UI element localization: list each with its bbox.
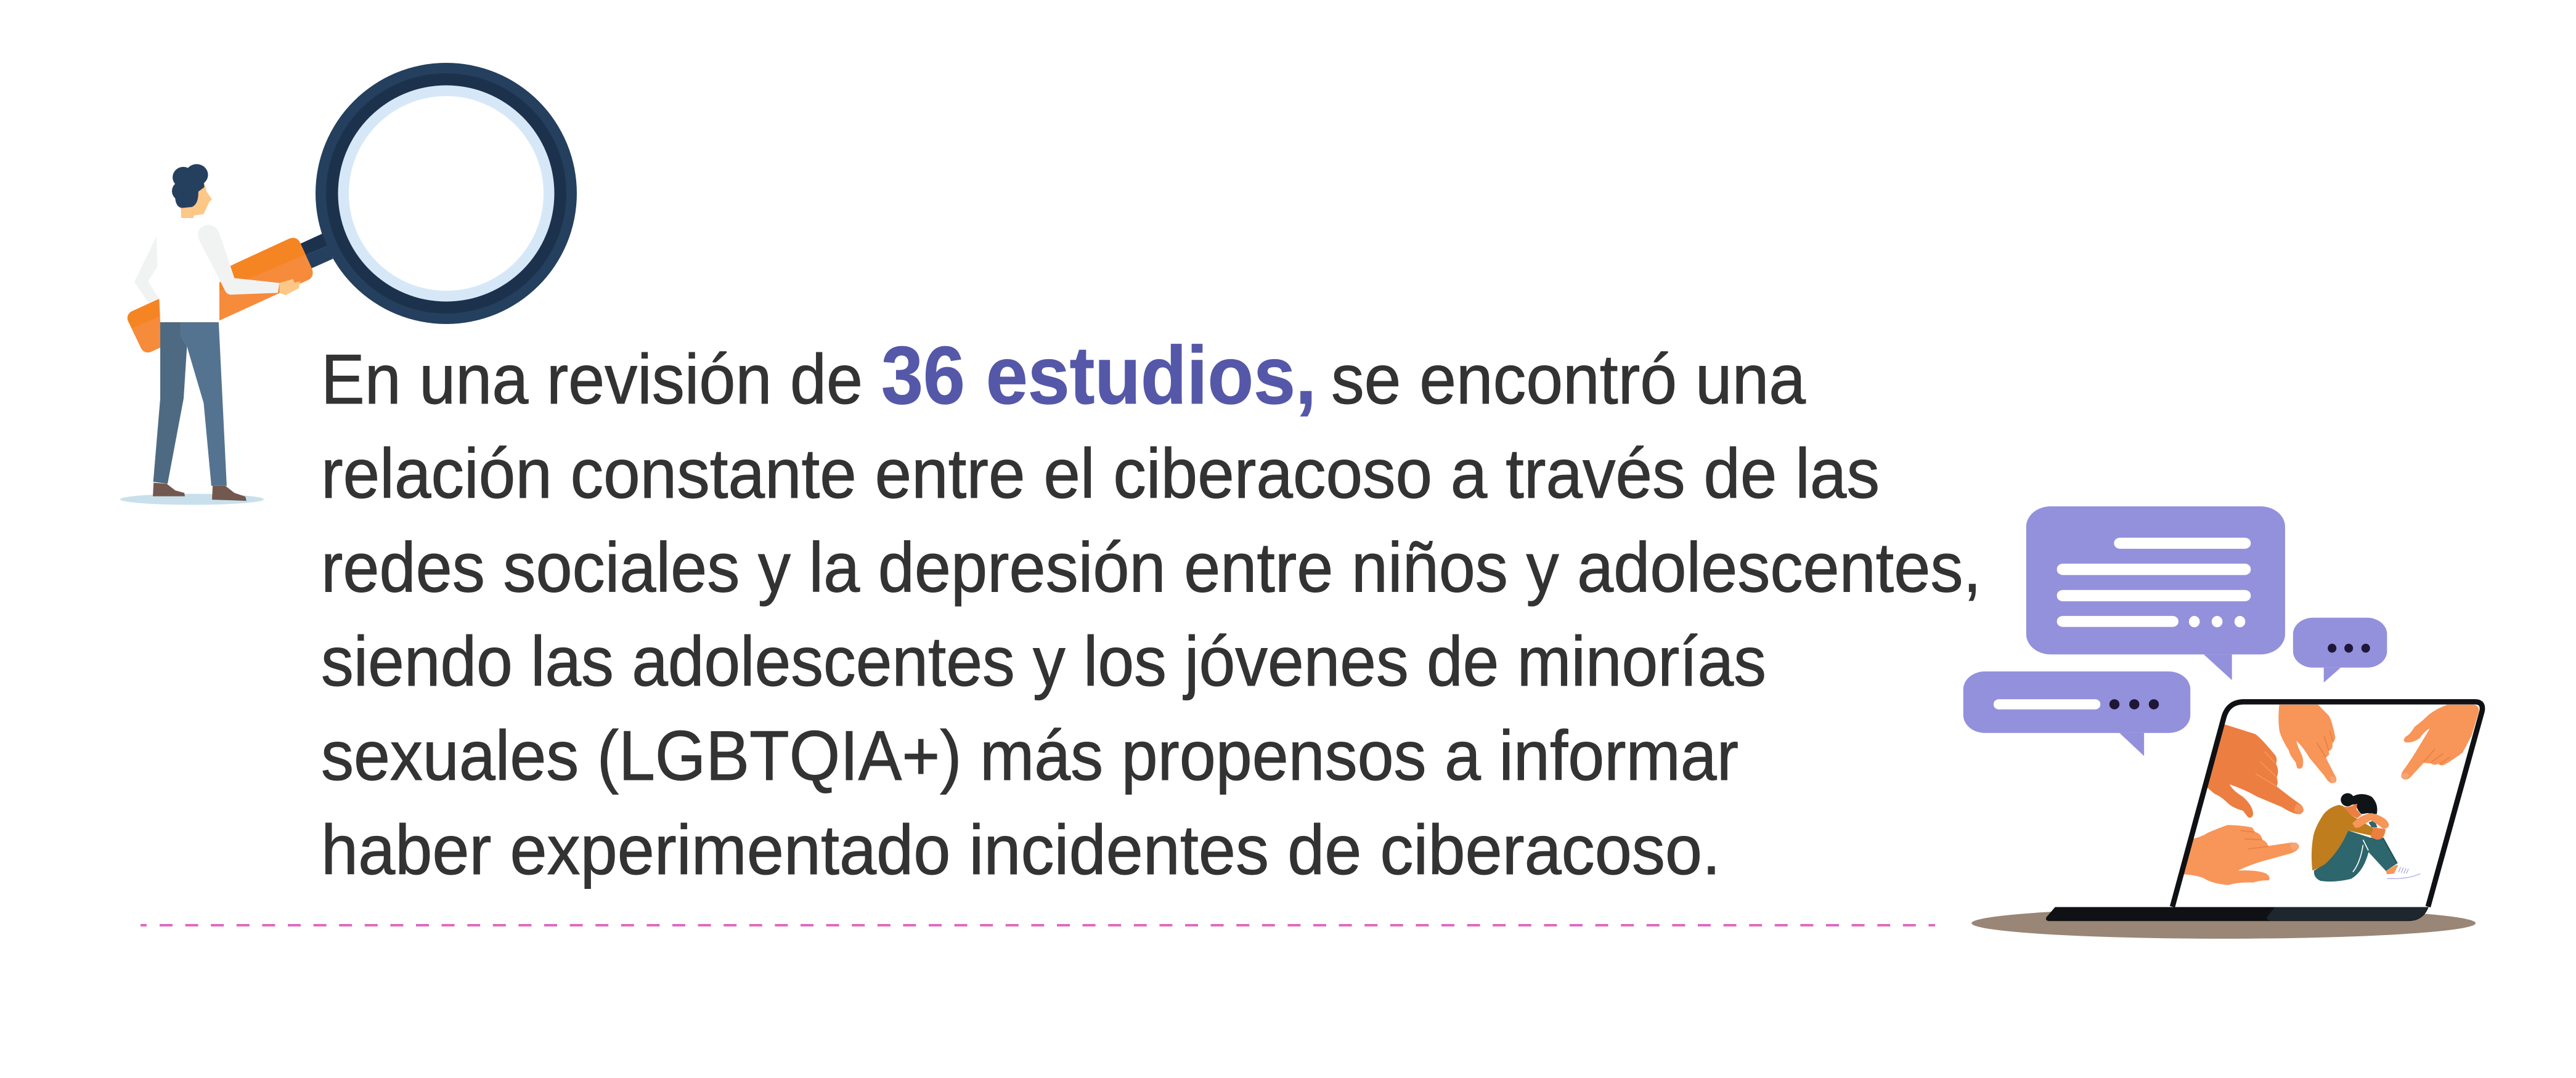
dashed divider [141,924,1935,926]
arms [2352,813,2389,840]
right sleeve [198,225,280,294]
laptop screen frame [2172,702,2482,907]
shoes [153,483,247,501]
hand: top centre [2278,705,2336,784]
main paragraph [321,330,1981,890]
highlight: 36 estudios: 36 estudios, [881,330,1316,421]
hair [2341,793,2377,814]
sad seated figure [2312,793,2420,881]
ground shadow [120,494,264,505]
icon: person holding a magnifying glass [120,63,577,505]
hand [280,279,300,295]
chat bubble: small [2293,618,2387,683]
text line 5: sexuales (LGBTQIA+) más propensos a informar [321,717,1738,795]
neck and face [181,182,212,218]
chat bubble: left [1963,671,2190,756]
text line 1 [321,330,1806,421]
foot and shoe marks [2386,865,2420,878]
chat bubbles and laptop base [1963,506,2476,939]
text line 1: En una revisión de [321,341,863,419]
text line 2: relación constante entre el ciberacoso a través de las [321,435,1880,513]
laptop ground shadow [1971,907,2476,939]
shirt [157,216,234,322]
hand: dark, upper left [2207,724,2304,818]
text line 4: siendo las adolescentes y los jóvenes de minorías [321,623,1766,701]
jeans [153,322,227,486]
magnifier shaft [300,233,333,269]
sweater [2312,805,2374,870]
hair [172,164,208,208]
chat bubble: large [2026,506,2285,680]
icon: magnifying glass lens [316,63,577,324]
laptop base [2046,907,2429,921]
left sleeve [134,236,159,303]
illustration: laptop with chat bubbles and pointing hands [1963,506,2482,939]
face [2343,803,2362,818]
magnifier orange handle [128,238,313,352]
figure: man and magnifier handle [120,164,333,505]
text line 3: redes sociales y la depresión entre niños y adolescentes, [321,529,1981,607]
hand: top right [2401,705,2479,779]
text line 1: se encontró una [1331,341,1806,419]
text line 6: haber experimentado incidentes de ciberacoso. [321,811,1721,890]
hand: lower left [2182,825,2299,885]
laptop screen contents [2172,702,2482,907]
trousers [2314,821,2397,881]
